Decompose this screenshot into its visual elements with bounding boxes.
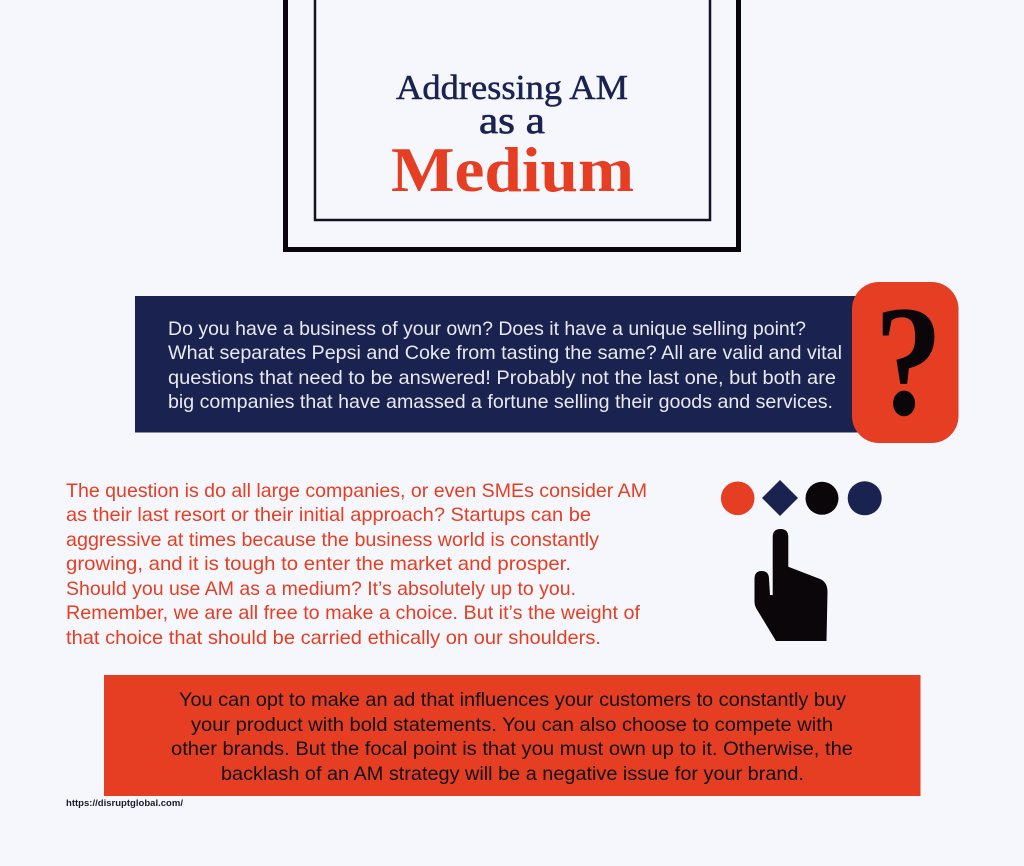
text block: the question: growing, and it is tough to enter the market and prosper.: [66, 553, 571, 575]
text block: the question: Remember, we are all free to make a choice. But it’s the weight of: [66, 602, 641, 624]
text block: the question: [66, 480, 647, 649]
advice text: You can opt to make an ad that influences your customers to constantly buy: [179, 689, 846, 711]
question text: questions that need to be answered! Probably not the last one, but both are: [168, 367, 836, 389]
panel: own up to it: [104, 675, 920, 796]
question text: Do you have a business of your own? Does it have a unique selling point?: [168, 318, 806, 340]
icon: question mark badge: ?: [874, 274, 942, 449]
title: Medium: [391, 135, 634, 205]
icon: choice shapes: [721, 480, 882, 516]
advice text: [171, 689, 853, 785]
question text: big companies that have amassed a fortune selling their goods and services.: [168, 391, 833, 413]
text block: the question: that choice that should be carried ethically on our shoulders.: [66, 627, 601, 649]
text block: the question: aggressive at times because the business world is constantly: [66, 529, 599, 551]
icon: pointing hand: [754, 529, 828, 641]
text block: the question: Should you use AM as a medium? It’s absolutely up to you.: [66, 578, 576, 600]
text block: the question: as their last resort or their initial approach? Startups can be: [66, 504, 591, 526]
title: [391, 68, 634, 205]
title: Addressing AM: [396, 68, 628, 107]
panel: business questions: [135, 296, 875, 432]
advice text: backlash of an AM strategy will be a negative issue for your brand.: [221, 763, 804, 785]
question text: What separates Pepsi and Coke from tasting the same? All are valid and vital: [168, 342, 842, 364]
advice text: your product with bold statements. You can also choose to compete with: [191, 714, 833, 736]
source url: https://disruptglobal.com/: [66, 798, 184, 808]
title frame: [286, 0, 738, 250]
text block: the question: The question is do all large companies, or even SMEs consider AM: [66, 480, 647, 502]
title: as a: [479, 100, 545, 142]
advice text: other brands. But the focal point is that you must own up to it. Otherwise, the: [171, 738, 853, 760]
question text: [168, 318, 842, 413]
